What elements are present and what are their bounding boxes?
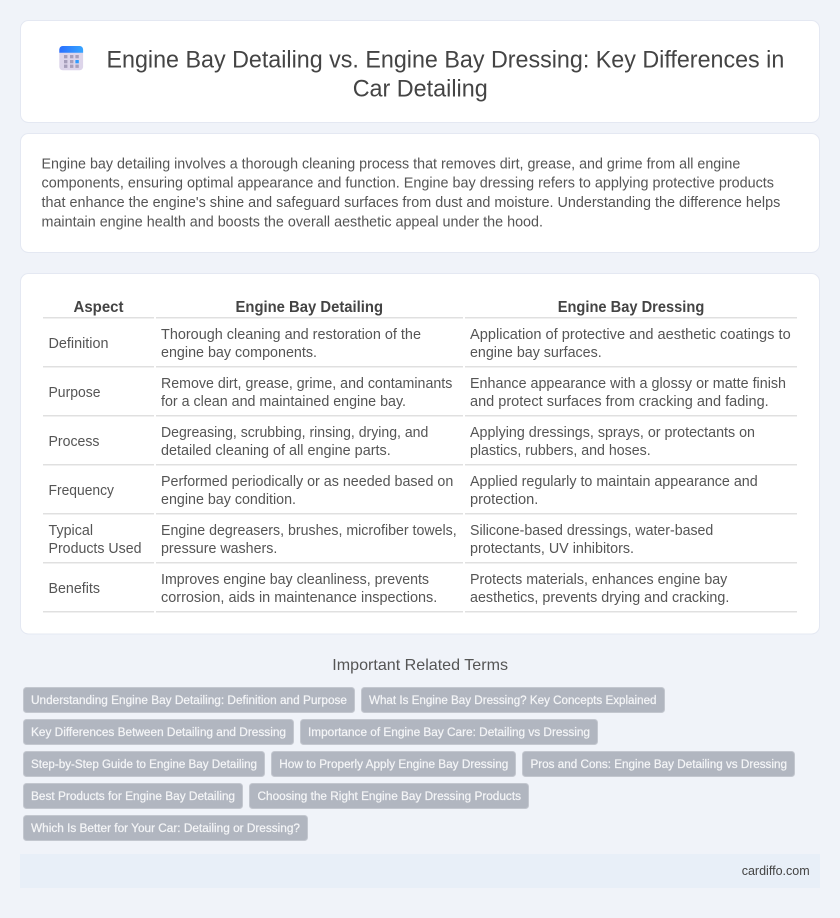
row: process: plastics, rubbers, and hoses. (470, 443, 651, 459)
chip (24, 720, 294, 744)
chip (24, 752, 264, 776)
row: typical products used: Engine degreasers, brushes, microfiber towels, (161, 523, 457, 539)
row: process: Process (48, 434, 100, 450)
chip: Importance of Engine Bay Care: Detailing vs Dressing (308, 725, 590, 739)
chip (272, 752, 516, 776)
chip: Choosing the Right Engine Bay Dressing Products (258, 789, 521, 803)
row: frequency: engine bay condition. (161, 492, 296, 508)
panel: title header (20, 20, 820, 122)
table header row: Engine Bay Detailing (236, 299, 383, 316)
row: process: detailed cleaning of all engine parts. (161, 443, 391, 459)
row: definition: Definition (48, 336, 109, 352)
row: benefits: Benefits (48, 581, 100, 597)
footer: cardiffo.com (742, 864, 810, 878)
title: Car Detailing (353, 76, 488, 102)
row: typical products used: Products Used (48, 541, 142, 557)
intro text block: that enhance the engine's shine and safeguard surfaces from dust and moisture. Understanding the difference helps (42, 195, 780, 211)
row: purpose: for a clean and maintained engine bay. (161, 394, 406, 410)
panel: introduction (20, 134, 820, 252)
chip (362, 688, 664, 712)
row: process (43, 425, 797, 466)
row: benefits: corrosion, aids in maintenance inspections. (161, 590, 437, 606)
row: benefits (43, 572, 797, 612)
table header row: Engine Bay Dressing (558, 299, 704, 316)
row: definition (43, 327, 797, 368)
intro text block (42, 156, 780, 230)
row: typical products used: protectants, UV inhibitors. (470, 541, 634, 557)
table header row: Aspect (74, 299, 124, 316)
row: purpose (43, 376, 797, 416)
row: benefits: Improves engine bay cleanliness, prevents (161, 572, 429, 588)
icon: calendar (59, 46, 83, 70)
chip (24, 816, 308, 840)
chip: Which Is Better for Your Car: Detailing or Dressing? (31, 821, 300, 835)
chip: What Is Engine Bay Dressing? Key Concepts Explained (369, 693, 656, 707)
row: definition: Application of protective and aesthetic coatings to (470, 327, 791, 343)
row: process: Applying dressings, sprays, or protectants on (470, 425, 755, 441)
footer (20, 854, 820, 888)
row: frequency: protection. (470, 492, 538, 508)
chip (250, 784, 528, 808)
row: benefits: Protects materials, enhances engine bay (470, 572, 728, 588)
row: definition: Thorough cleaning and restoration of the (161, 327, 421, 343)
title: Engine Bay Detailing vs. Engine Bay Dressing: Key Differences in (106, 46, 784, 74)
chip: Understanding Engine Bay Detailing: Definition and Purpose (31, 693, 347, 707)
intro text block: maintain engine health and boosts the overall aesthetic appeal under the hood. (42, 214, 543, 230)
row: typical products used: Silicone-based dressings, water-based (470, 523, 713, 539)
row: purpose: Enhance appearance with a glossy or matte finish (470, 376, 786, 392)
row: process: Degreasing, scrubbing, rinsing, drying, and (161, 425, 428, 441)
chip: Best Products for Engine Bay Detailing (31, 789, 235, 803)
chip: How to Properly Apply Engine Bay Dressing (279, 757, 508, 771)
table header row (43, 299, 797, 318)
heading: important related terms: Important Related Terms (332, 657, 508, 674)
row: definition: engine bay components. (161, 345, 317, 361)
row: purpose: and protect surfaces from cracking and fading. (470, 394, 769, 410)
row: typical products used: Typical (48, 523, 93, 539)
panel: comparison table (20, 274, 820, 634)
row: typical products used (43, 523, 797, 564)
row: frequency: Performed periodically or as needed based on (161, 474, 453, 490)
row: frequency: Applied regularly to maintain appearance and (470, 474, 758, 490)
chip: Key Differences Between Detailing and Dressing (31, 725, 286, 739)
row: purpose: Remove dirt, grease, grime, and contaminants (161, 376, 452, 392)
row: benefits: aesthetics, prevents drying and cracking. (470, 590, 729, 606)
chip (300, 720, 598, 744)
chip (24, 688, 354, 712)
chip: Pros and Cons: Engine Bay Detailing vs Dressing (530, 757, 787, 771)
row: typical products used: pressure washers. (161, 541, 277, 557)
row: definition: engine bay surfaces. (470, 345, 602, 361)
related terms chips (24, 688, 794, 840)
intro text block: components, ensuring optimal appearance and function. Engine bay dressing refers to applying protective products (42, 176, 774, 192)
intro text block: Engine bay detailing involves a thorough cleaning process that removes dirt, grease, and grime from all engine (42, 156, 740, 172)
row: frequency: Frequency (48, 483, 115, 499)
row: purpose: Purpose (48, 385, 101, 401)
row: frequency (43, 474, 797, 514)
chip: Step-by-Step Guide to Engine Bay Detailing (31, 757, 257, 771)
title (106, 46, 784, 102)
chip (24, 784, 242, 808)
chip (522, 752, 794, 776)
